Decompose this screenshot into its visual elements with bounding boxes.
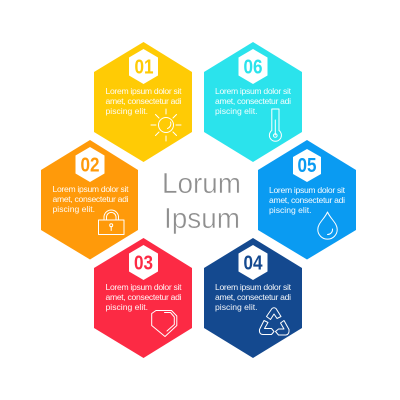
- text block 01: amet, consectetur adi: [106, 96, 182, 106]
- title: center text: Lorum: [162, 168, 241, 200]
- text block 02: piscing elit.: [52, 204, 95, 214]
- text block 02: amet, consectetur adi: [52, 194, 129, 204]
- text block 04: Lorem ipsum dolor sit: [215, 282, 292, 292]
- badge 05: 05: [298, 155, 316, 177]
- text block 05: piscing elit.: [269, 205, 312, 215]
- icon: shield: [152, 310, 177, 336]
- icon: thermometer: [269, 109, 281, 141]
- icon: padlock: [98, 210, 124, 234]
- text block 03: amet, consectetur adi: [106, 292, 182, 302]
- badge 03: 03: [134, 252, 153, 274]
- text block 04: amet, consectetur adi: [215, 292, 291, 302]
- text block 05: Lorem ipsum dolor sit: [269, 185, 346, 195]
- text block 04: piscing elit.: [215, 302, 258, 312]
- badge 02: 02: [80, 154, 100, 176]
- text block 06: Lorem ipsum dolor sit: [215, 86, 292, 96]
- text block 03: piscing elit.: [106, 302, 148, 312]
- text block 03: Lorem ipsum dolor sit: [106, 282, 182, 292]
- badge 01: 01: [134, 56, 154, 78]
- panel 05: blue hexagon: [258, 140, 356, 260]
- text block 06: amet, consectetur adi: [215, 96, 291, 106]
- panel 03: red hexagon: [94, 238, 192, 358]
- text block 02: Lorem ipsum dolor sit: [52, 184, 129, 194]
- text block 05: amet, consectetur adi: [269, 195, 345, 205]
- panel 01: yellow hexagon: [94, 42, 192, 162]
- badge 04: 04: [244, 252, 263, 274]
- title: center text: Ipsum: [164, 203, 240, 235]
- text block 06: piscing elit.: [215, 106, 258, 116]
- text block 01: Lorem ipsum dolor sit: [106, 86, 182, 96]
- title: center text: [162, 168, 241, 235]
- text block 01: piscing elit.: [106, 106, 148, 116]
- icon: recycle arrows: [259, 308, 289, 335]
- icon: water drop: [318, 212, 337, 239]
- badge 06: 06: [244, 56, 262, 78]
- panel 06: cyan hexagon: [204, 42, 302, 162]
- icon: sun: [151, 109, 181, 141]
- panel 04: navy hexagon: [204, 238, 302, 358]
- panel 02: orange hexagon: [41, 140, 138, 260]
